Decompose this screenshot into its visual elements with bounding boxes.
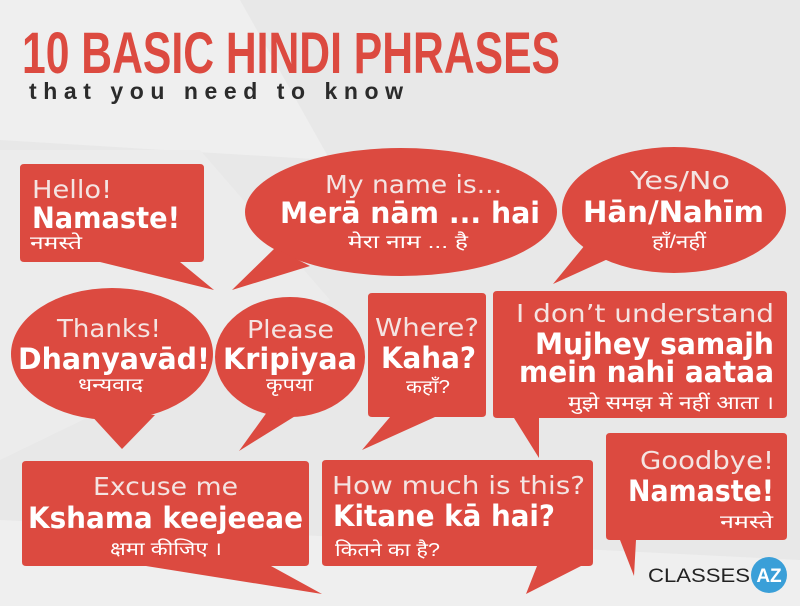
bubble: excuse me [22,461,322,594]
bubble: my name: My name is... [325,170,502,199]
bubble: thanks: Thanks! [56,314,161,343]
bubble: yes/no: हाँ/नहीं [652,231,707,252]
bubble: I don't understand: I don’t understand [516,299,774,328]
bubble: hello: Namaste! [32,201,180,235]
bubble: thanks: धन्यवाद [78,374,144,395]
title: 10 BASIC HINDI PHRASES [22,21,560,86]
bubble: thanks [11,288,213,449]
bubble: where: Where? [375,313,479,342]
bubble: yes/no: Yes/No [629,166,730,195]
bubble: hello: Hello! [32,175,112,204]
bubble: how much: How much is this? [332,471,585,500]
bubble: how much: कितने का है? [335,539,440,560]
bubble: how much [322,460,593,594]
bubble: please: Kripiyaa [223,342,357,376]
bubble: yes/no [553,147,786,284]
subtitle: that you need to know [29,78,403,104]
bubble: I don't understand: mein nahi aataa [519,355,774,389]
logo: ClassesAZ [648,557,787,593]
bubble: goodbye: Namaste! [628,474,774,508]
logo: ClassesAZ: CLASSES [648,566,750,587]
bubble: where: Kaha? [381,341,476,375]
bubble: where: कहाँ? [406,376,450,397]
title [22,21,560,104]
bubble: my name [232,148,557,290]
bubble: thanks: Dhanyavād! [18,342,210,376]
bubble: yes/no: Hān/Nahīm [583,195,764,229]
bubble: my name: मेरा नाम ... है [348,231,470,252]
bubble: excuse me: Kshama keejeeae [28,501,303,535]
bubble: hello [20,164,214,290]
bubble: goodbye: Goodbye! [640,446,774,475]
bubble: hello: नमस्ते [30,232,83,253]
bubble: please [215,297,365,451]
bubble: where [362,293,486,450]
bubble: please: कृपया [266,374,314,396]
logo: ClassesAZ: AZ [756,566,782,587]
bubble: I don't understand [493,291,787,458]
bubble: goodbye: नमस्ते [720,511,774,532]
bubble: how much: Kitane kā hai? [333,499,555,533]
bubble: excuse me: क्षमा कीजिए । [110,538,222,559]
bubble: please: Please [247,315,334,344]
bubble: I don't understand: मुझे समझ में नहीं आता । [568,392,774,414]
bubble: excuse me: Excuse me [93,472,238,501]
bubble: my name: Merā nām ... hai [280,196,540,230]
bubble: I don't understand: Mujhey samajh [535,327,774,361]
bubble: goodbye [606,433,787,576]
